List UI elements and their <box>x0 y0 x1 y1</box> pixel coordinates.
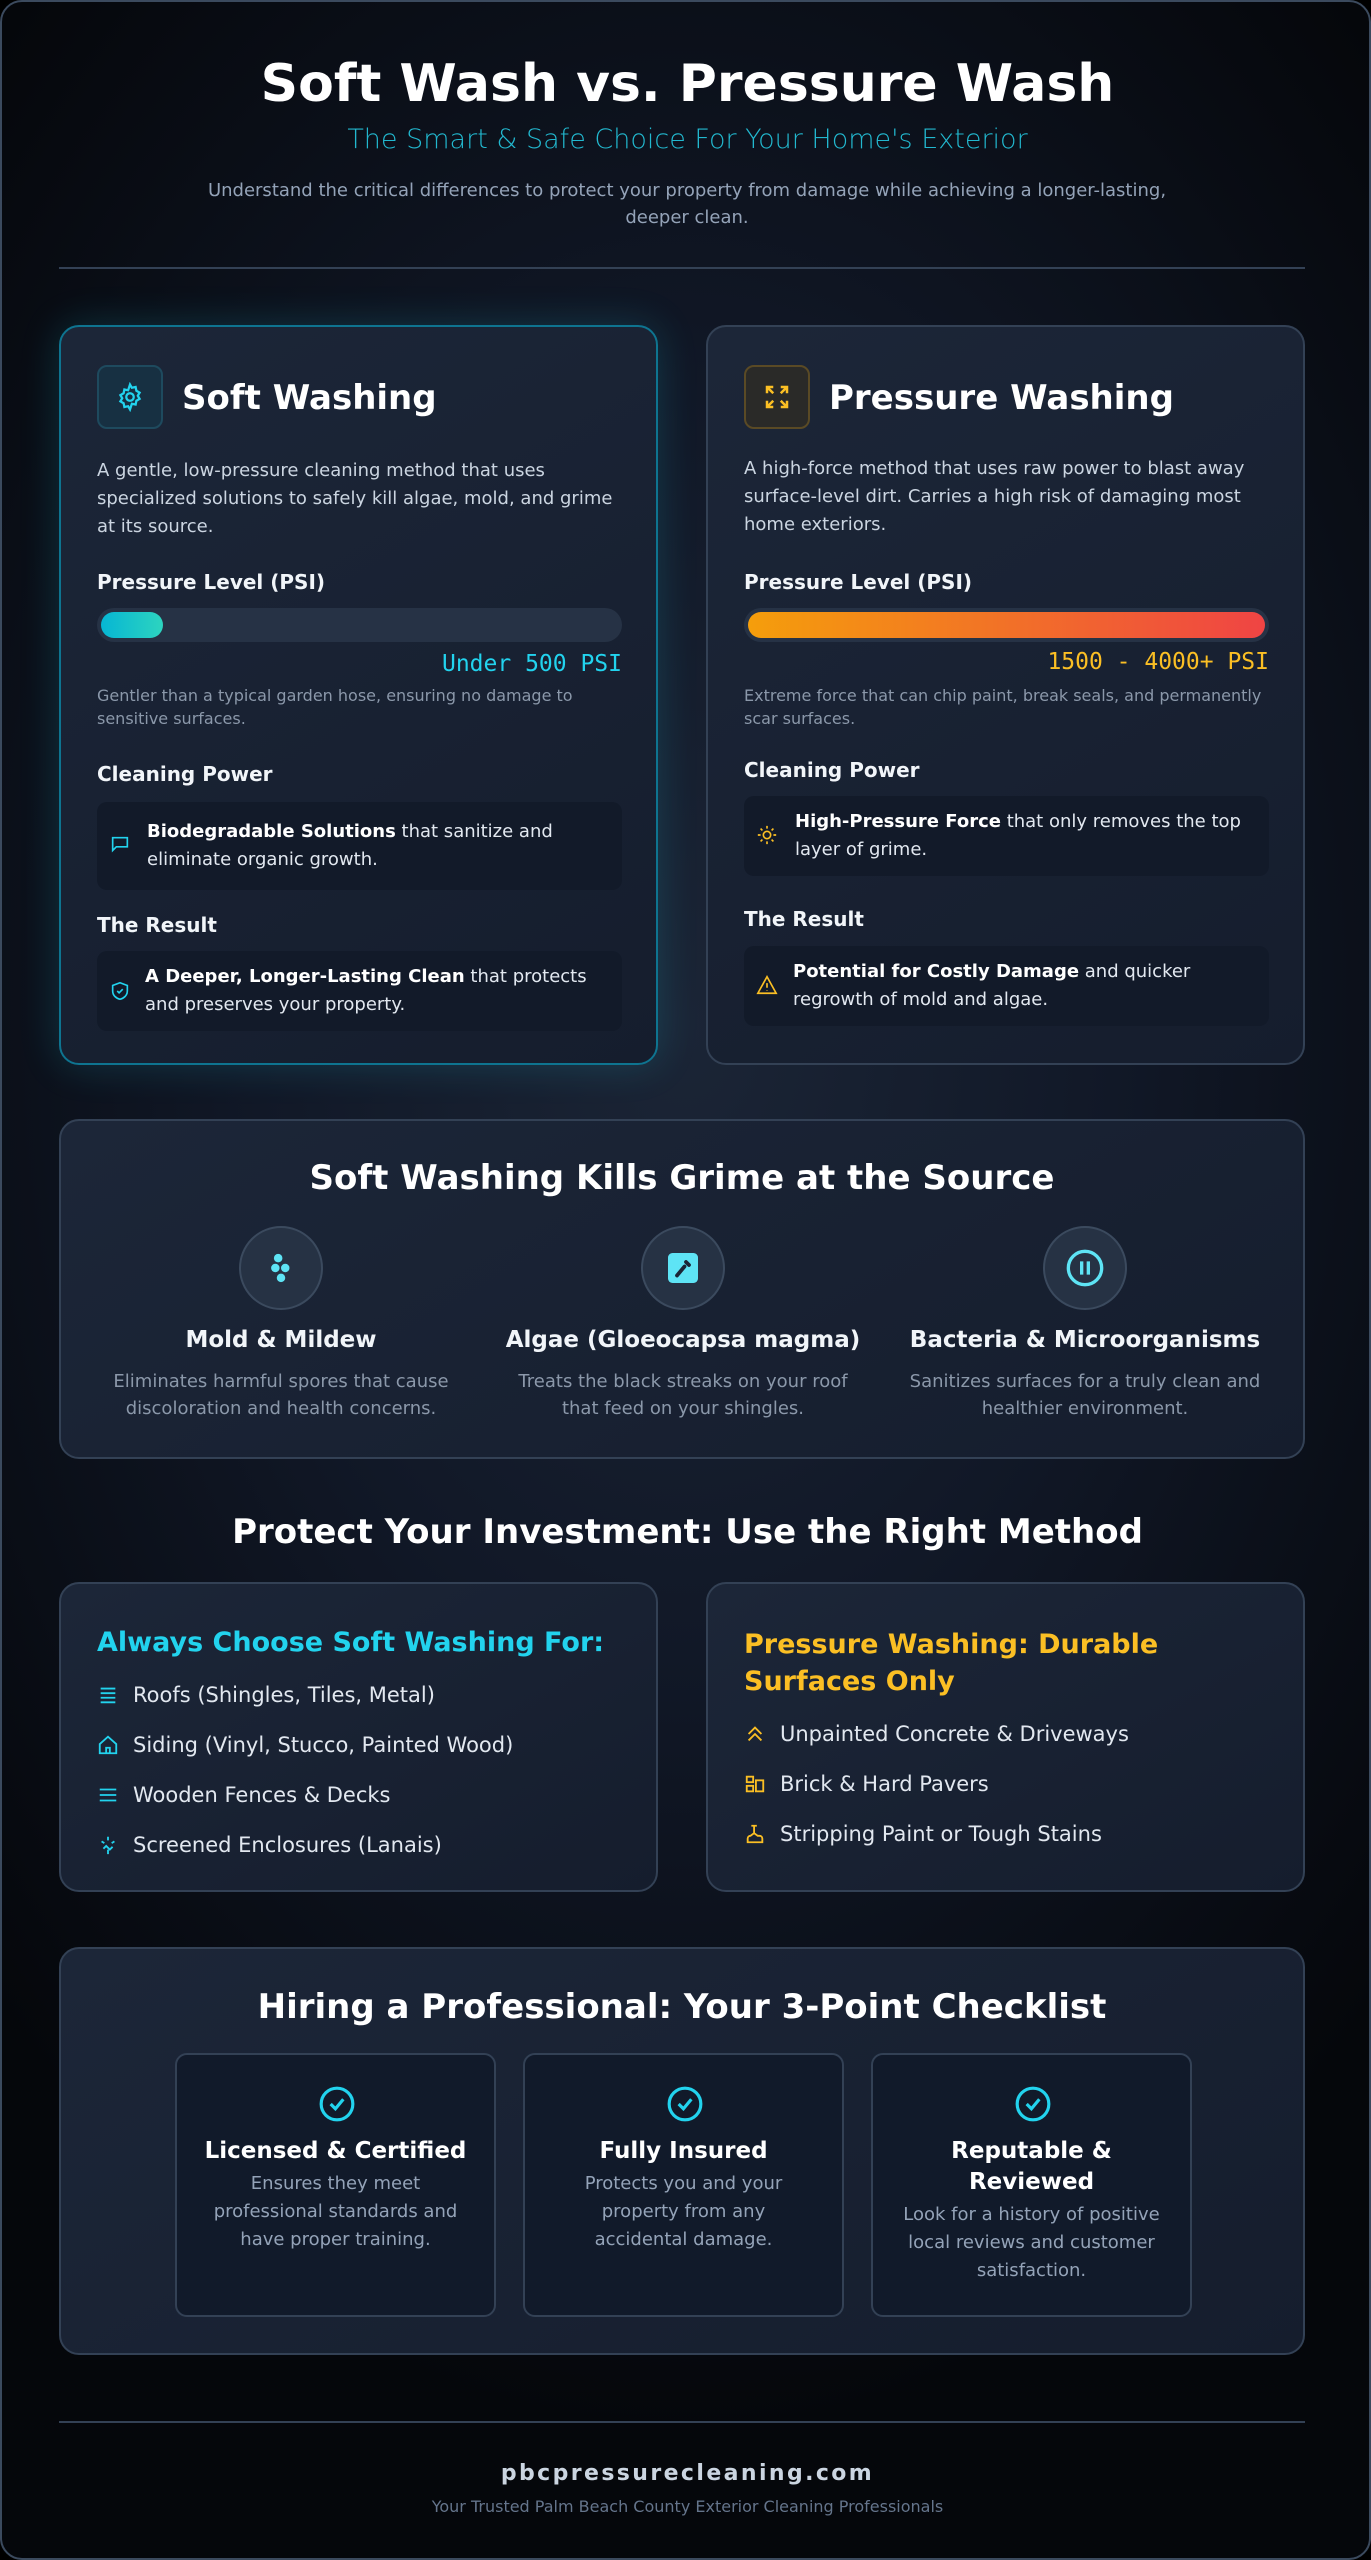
result box: A Deeper, Longer-Lasting Clean that protects and preserves your property. <box>145 966 587 1015</box>
icon: bacteria <box>1043 1226 1127 1310</box>
icon: check <box>668 2086 702 2122</box>
panel: pressure washing surfaces <box>706 1582 1305 1892</box>
heading: Hiring a Professional: Your 3-Point Checklist <box>258 1987 1106 2027</box>
checklist card: insured <box>523 2053 844 2317</box>
footer domain: pbcpressurecleaning.com <box>501 2461 874 2486</box>
list: Unpainted Concrete & Driveways <box>780 1722 1129 1746</box>
item: mold: Eliminates harmful spores that cause discoloration and health concerns. <box>113 1371 449 1419</box>
item: bacteria <box>910 1226 1260 1419</box>
result label: The Result <box>744 907 864 931</box>
panel: kills grime <box>59 1119 1305 1459</box>
icon: spray <box>112 836 128 852</box>
cleaning box <box>744 796 1269 876</box>
panel: soft washing <box>59 325 658 1065</box>
list <box>746 1722 1129 1846</box>
list: Roofs (Shingles, Tiles, Metal) <box>133 1683 435 1707</box>
pressure bar <box>744 608 1269 642</box>
icon: sun <box>758 826 776 844</box>
list <box>98 1683 513 1857</box>
cleaning power label: Cleaning Power <box>97 762 273 786</box>
panel: soft washing surfaces <box>59 1582 658 1892</box>
intro text: Understand the critical differences to protect your property from damage while achieving a longer-lasting, deeper clean. <box>208 180 1166 228</box>
description: A high-force method that uses raw power to blast away surface-level dirt. Carries a high risk of damaging most home exteriors. <box>744 458 1244 535</box>
heading: Pressure Washing <box>829 378 1174 418</box>
list: Screened Enclosures (Lanais) <box>133 1833 442 1857</box>
panel: pressure washing <box>706 325 1305 1065</box>
icon: algae <box>641 1226 725 1310</box>
icon: gear <box>97 365 163 429</box>
list: Wooden Fences & Decks <box>133 1783 390 1807</box>
icon: mold <box>239 1226 323 1310</box>
footer tagline: Your Trusted Palm Beach County Exterior Cleaning Professionals <box>432 2497 943 2516</box>
item: algae <box>506 1226 860 1419</box>
checklist card: licensed <box>175 2053 496 2317</box>
list: Brick & Hard Pavers <box>780 1772 989 1796</box>
item: algae: Treats the black streaks on your roof that feed on your shingles. <box>518 1371 848 1419</box>
checklist card: reputable: Look for a history of positive local reviews and customer satisfaction. <box>903 2204 1160 2281</box>
cleaning box: High-Pressure Force that only removes the top layer of grime. <box>795 811 1241 860</box>
item: algae: Algae (Gloeocapsa magma) <box>506 1327 860 1353</box>
pressure bar <box>97 608 622 642</box>
subtitle: The Smart & Safe Choice For Your Home's Exterior <box>347 124 1028 155</box>
result box <box>744 946 1269 1026</box>
icon: check <box>1016 2086 1050 2122</box>
checklist card: insured: Protects you and your property from any accidental damage. <box>585 2173 782 2250</box>
list: Siding (Vinyl, Stucco, Painted Wood) <box>133 1733 513 1757</box>
icon: expand arrows <box>744 365 810 429</box>
list: Stripping Paint or Tough Stains <box>780 1822 1102 1846</box>
heading: Pressure Washing: Durable Surfaces Only <box>744 1629 1158 1697</box>
item: bacteria: Bacteria & Microorganisms <box>910 1327 1260 1353</box>
cleaning power label: Cleaning Power <box>744 758 920 782</box>
title: Soft Wash vs. Pressure Wash <box>261 54 1114 114</box>
cleaning box <box>97 802 622 890</box>
heading: Soft Washing Kills Grime at the Source <box>310 1158 1054 1198</box>
item: mold: Mold & Mildew <box>185 1327 377 1353</box>
item: bacteria: Sanitizes surfaces for a truly clean and healthier environment. <box>910 1371 1260 1419</box>
icon: warning <box>756 975 778 994</box>
icon: shield <box>112 982 128 1000</box>
result box: Potential for Costly Damage and quicker regrowth of mold and algae. <box>793 961 1190 1010</box>
checklist card: insured: Fully Insured <box>599 2138 768 2164</box>
psi value: Under 500 PSI <box>442 651 622 677</box>
item: mold <box>113 1226 449 1419</box>
panel: hiring checklist <box>59 1947 1305 2355</box>
checklist card: reputable: Reputable & Reviewed <box>951 2138 1112 2195</box>
heading: protect: Protect Your Investment: Use the Right Method <box>232 1512 1143 1552</box>
result box <box>97 951 622 1031</box>
heading: Soft Washing <box>182 378 437 418</box>
pressure label: Pressure Level (PSI) <box>744 570 972 594</box>
cleaning box: Biodegradable Solutions that sanitize and eliminate organic growth. <box>147 821 553 870</box>
note: Gentler than a typical garden hose, ensuring no damage to sensitive surfaces. <box>97 686 573 728</box>
checklist card: licensed: Ensures they meet professional standards and have proper training. <box>214 2173 457 2250</box>
pressure label: Pressure Level (PSI) <box>97 570 325 594</box>
description: A gentle, low-pressure cleaning method that uses specialized solutions to safely kill algae, mold, and grime at its source. <box>97 460 612 537</box>
psi value: 1500 - 4000+ PSI <box>1047 649 1269 675</box>
result label: The Result <box>97 913 217 937</box>
note: Extreme force that can chip paint, break seals, and permanently scar surfaces. <box>744 686 1261 728</box>
heading: Always Choose Soft Washing For: <box>97 1627 604 1658</box>
checklist card: reputable <box>871 2053 1192 2317</box>
checklist card: licensed: Licensed & Certified <box>205 2138 466 2164</box>
icon: check <box>320 2086 354 2122</box>
